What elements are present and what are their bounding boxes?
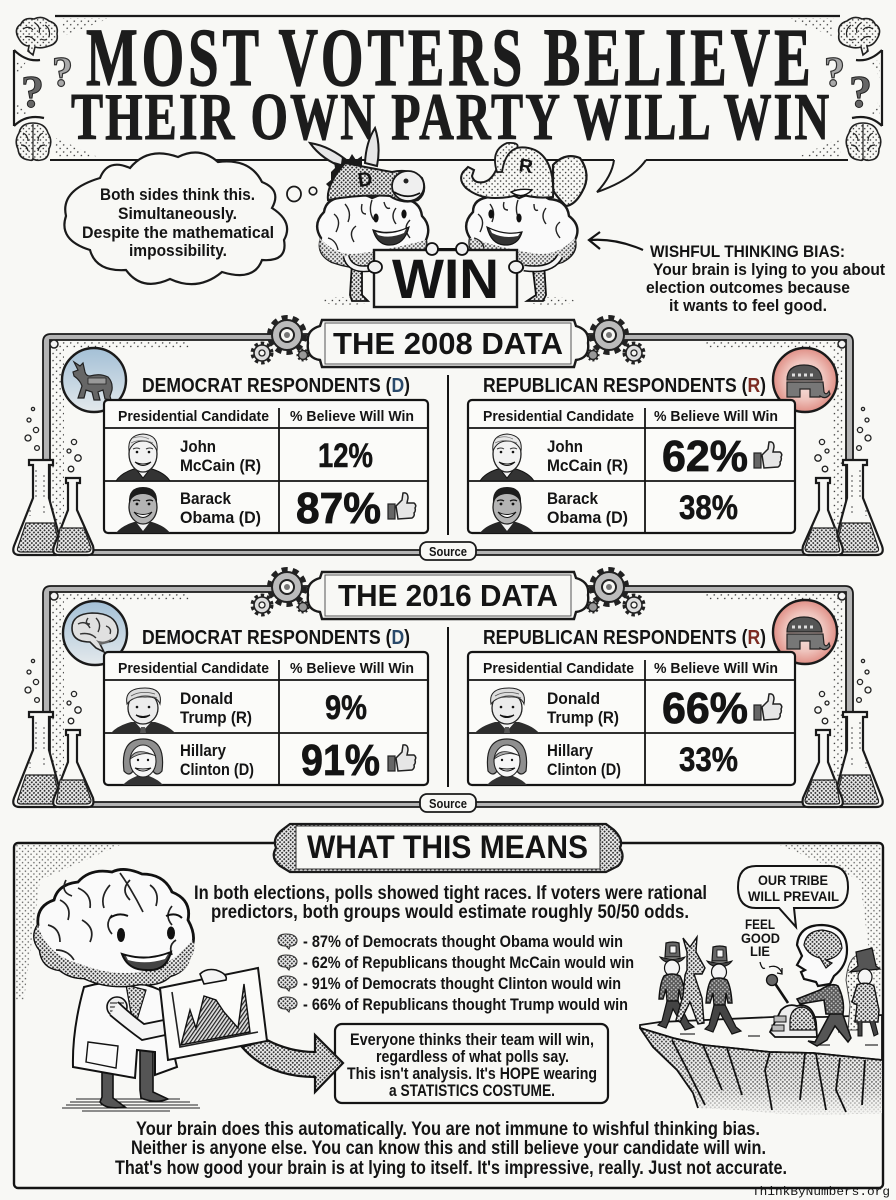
panel frame (14, 843, 883, 1188)
list: poll findings: - 62% of Republicans thought McCain would win (303, 953, 634, 972)
panel: what this means (14, 824, 883, 1188)
table: democrat respondents 2008: McCain (R) (180, 456, 261, 475)
value: 66%: 66% (662, 684, 748, 733)
speech bubble: our tribe will prevail: OUR TRIBE (758, 873, 828, 888)
label: feel good lie (741, 917, 782, 974)
source pill (420, 794, 476, 812)
source pill: Source (429, 797, 467, 811)
sign: WIN (368, 243, 523, 310)
label: feel good lie: LIE (750, 944, 770, 959)
portrait: Obama (480, 487, 534, 533)
portrait: McCain (116, 434, 170, 481)
table: republican respondents 2008: McCain (R) (547, 456, 628, 475)
panel: the 2008 data (13, 318, 883, 560)
table: republican respondents 2016: Hillary (547, 741, 593, 760)
heading: democrat respondents: DEMOCRAT RESPONDENTS (D) (142, 626, 410, 649)
icon: question marks: ? (824, 50, 845, 96)
icon: question marks: ? (21, 66, 44, 117)
callout box: This isn't analysis. It's HOPE wearing (347, 1065, 597, 1083)
table: republican respondents 2016: % Believe Will Win (654, 660, 778, 677)
table: republican respondents 2016 (468, 652, 795, 785)
heading: the 2008 data (308, 320, 588, 367)
panel frame (43, 334, 853, 555)
thought bubble: Both sides think this. (100, 185, 255, 204)
sign: WIN: WIN (392, 247, 499, 310)
thought bubble (64, 153, 317, 284)
portrait: Trump (111, 688, 175, 733)
source pill (420, 542, 476, 560)
value: 87%: 87% (296, 484, 381, 533)
illustration: back voters (846, 948, 880, 1036)
thought bubble: impossibility. (129, 241, 227, 260)
portrait: Clinton (123, 739, 163, 785)
heading: the 2008 data: THE 2008 DATA (333, 326, 563, 361)
panel: the 2016 data (13, 570, 883, 812)
icon: question marks: ? (52, 50, 73, 96)
badge: brain (63, 601, 127, 665)
table: democrat respondents 2016 (104, 652, 428, 785)
text: conclusion: That's how good your brain is at lying to itself. It's impressive, really. Just not accurate. (115, 1158, 787, 1179)
icon: brain top right (839, 17, 880, 55)
badge: donkey (62, 348, 126, 412)
table: democrat respondents 2008: Presidential Candidate (118, 408, 269, 425)
table: republican respondents 2016: Presidential Candidate (483, 660, 634, 677)
text: intro: predictors, both groups would estimate roughly 50/50 odds. (211, 902, 689, 923)
heading: republican respondents: REPUBLICAN RESPONDENTS (R) (483, 626, 766, 649)
portrait: Trump (475, 688, 539, 733)
source pill: Source (429, 545, 467, 559)
value: 33%: 33% (679, 741, 738, 779)
donkey hat: D (357, 168, 374, 192)
value: 38%: 38% (679, 489, 738, 527)
speech tail from title banner (597, 160, 646, 192)
text: intro (194, 883, 707, 923)
illustration: lever operator and machine (766, 925, 851, 1046)
gears left (252, 570, 308, 615)
text: conclusion: Neither is anyone else. You can know this and still believe your candidate will win. (131, 1138, 766, 1159)
label: feel good lie: GOOD (741, 931, 780, 946)
value: 9%: 9% (325, 689, 367, 727)
list: poll findings: - 87% of Democrats thought Obama would win (303, 932, 623, 951)
credit: ThinkByNumbers.org (752, 1185, 890, 1199)
table: democrat respondents 2016: Presidential Candidate (118, 660, 269, 677)
table: republican respondents 2008: % Believe Will Win (654, 408, 778, 425)
heading: the 2016 data (308, 572, 588, 619)
divider (447, 375, 449, 535)
table: democrat respondents 2008: % Believe Will Win (290, 408, 414, 425)
table: republican respondents 2008: John (547, 437, 583, 456)
flasks right (803, 659, 883, 807)
icon: question marks (21, 50, 872, 117)
elephant hat (461, 143, 587, 206)
icon: thumbs up (754, 694, 782, 720)
illustration: cliff (640, 1015, 882, 1115)
heading: republican respondents: REPUBLICAN RESPONDENTS (R) (483, 374, 766, 397)
gears right (588, 570, 644, 615)
table: republican respondents 2008: Presidential Candidate (483, 408, 634, 425)
badge: elephant (773, 348, 837, 412)
callout box: Everyone thinks their team will win, (350, 1031, 594, 1049)
list: poll findings: - 91% of Democrats thought Clinton would win (303, 974, 621, 993)
title: MOST VOTERS BELIEVE (86, 12, 811, 104)
table: democrat respondents 2016: Hillary (180, 741, 226, 760)
table: republican respondents 2016: Clinton (D) (547, 760, 621, 779)
thought bubble: Simultaneously. (118, 204, 237, 223)
table: democrat respondents 2016: Clinton (D) (180, 760, 254, 779)
heading: what this means (274, 824, 623, 872)
flasks left (13, 659, 93, 807)
divider (447, 627, 449, 787)
list: poll findings (278, 932, 634, 1014)
callout box: a STATISTICS COSTUME. (389, 1082, 555, 1100)
icon: brain bottom right (846, 123, 881, 160)
title banner frame (14, 16, 882, 160)
title (71, 12, 829, 154)
arrow to callout (242, 1035, 343, 1092)
table: republican respondents 2008: Obama (D) (547, 508, 628, 527)
panel frame (43, 586, 853, 807)
gears left (252, 318, 308, 363)
heading: democrat respondents: DEMOCRAT RESPONDENTS (D) (142, 374, 410, 397)
speech bubble: our tribe will prevail: WILL PREVAIL (748, 889, 839, 904)
portrait: Obama (116, 487, 170, 533)
table: republican respondents 2008: Barack (547, 489, 598, 508)
speech bubble: our tribe will prevail (738, 866, 848, 927)
portrait: McCain (480, 434, 534, 481)
character: democrat brain (317, 194, 428, 305)
value: 91%: 91% (301, 736, 380, 785)
table: democrat respondents 2008 (104, 400, 428, 533)
heading: the 2016 data: THE 2016 DATA (338, 578, 558, 613)
value: 62%: 62% (662, 432, 748, 481)
chart held by scientist (160, 968, 267, 1060)
table: democrat respondents 2008: Barack (180, 489, 231, 508)
table: democrat respondents 2016: Donald (180, 689, 233, 708)
character: republican brain (466, 194, 577, 305)
callout: wishful thinking bias: it wants to feel good. (669, 296, 827, 315)
icon: thumbs up (388, 493, 416, 519)
callout: wishful thinking bias (646, 242, 885, 315)
gears right (588, 318, 644, 363)
text: conclusion (115, 1119, 787, 1179)
table: republican respondents 2008 (468, 400, 795, 533)
table: republican respondents 2016: Donald (547, 689, 600, 708)
icon: thumbs up (388, 745, 416, 771)
badge: elephant (773, 600, 837, 664)
heading: what this means: WHAT THIS MEANS (307, 829, 588, 865)
value: 12%: 12% (318, 437, 373, 475)
flasks left (13, 407, 93, 555)
arrow to brains (589, 232, 643, 250)
text: conclusion: Your brain does this automatically. You are not immune to wishful thinking bias. (136, 1119, 760, 1140)
callout box: regardless of what polls say. (376, 1048, 569, 1066)
table: democrat respondents 2008: Obama (D) (180, 508, 261, 527)
donkey hat (310, 128, 424, 202)
portrait: Clinton (487, 739, 527, 785)
icon: question marks: ? (849, 66, 872, 117)
text: intro: In both elections, polls showed tight races. If voters were rational (194, 883, 707, 904)
illustration: marching voters (658, 937, 741, 1034)
table: republican respondents 2016: Trump (R) (547, 708, 619, 727)
elephant hat: R (518, 155, 534, 178)
table: democrat respondents 2016: % Believe Will Win (290, 660, 414, 677)
icon: brain top left (16, 17, 57, 55)
title: THEIR OWN PARTY WILL WIN (71, 79, 829, 154)
callout: wishful thinking bias: WISHFUL THINKING BIAS: (650, 242, 845, 261)
flasks right (803, 407, 883, 555)
icon: brain bottom left (16, 123, 51, 160)
table: democrat respondents 2016: Trump (R) (180, 708, 252, 727)
label: feel good lie: FEEL (745, 917, 775, 932)
thought bubble: Despite the mathematical (82, 223, 274, 242)
callout: wishful thinking bias: election outcomes because (646, 278, 850, 297)
list: poll findings: - 66% of Republicans thought Trump would win (303, 995, 628, 1014)
table: democrat respondents 2008: John (180, 437, 216, 456)
callout box (335, 1024, 608, 1103)
icon: thumbs up (754, 442, 782, 468)
character: scientist brain (34, 869, 200, 1111)
